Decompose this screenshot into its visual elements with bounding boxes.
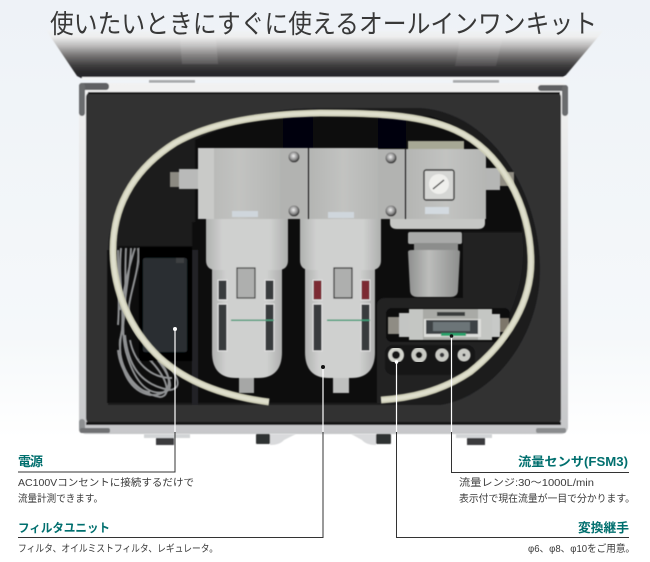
filter heads xyxy=(198,148,378,219)
callout: adapters xyxy=(528,520,635,555)
callout: filter unit: フィルタユニット xyxy=(18,521,110,535)
power unit: cable and adapter xyxy=(118,247,192,397)
leader line: power xyxy=(18,327,177,472)
handle and feet xyxy=(144,434,492,445)
icon: coiled cable xyxy=(118,248,178,397)
callout: flow sensor: 流量レンジ:30〜1000L/min xyxy=(459,477,594,489)
filter bowl 2 xyxy=(300,219,381,393)
callout: adapters: φ6、φ8、φ10をご用意。 xyxy=(528,542,635,555)
left fitting xyxy=(170,169,198,189)
aluminium case xyxy=(79,83,568,434)
icon: pressure gauge xyxy=(424,170,454,200)
black cutouts xyxy=(107,116,522,403)
callout: flow sensor: 流量センサ(FSM3) xyxy=(518,454,628,469)
adapters xyxy=(390,349,468,361)
adapter xyxy=(139,247,192,361)
regulator xyxy=(390,141,486,297)
callout: filter unit: フィルタ、オイルミストフィルタ、レギュレータ。 xyxy=(18,543,218,555)
callout: flow sensor: 表示付で現在流量が一目で分かります。 xyxy=(459,492,635,505)
callout: adapters: 変換継手 xyxy=(578,520,629,535)
flow sensor xyxy=(388,309,509,340)
callout: power xyxy=(18,454,194,505)
callout: power: 流量計測できます。 xyxy=(18,492,103,505)
case frame xyxy=(79,83,568,434)
leader line: flow sensor xyxy=(450,334,629,472)
inner foam panels xyxy=(192,250,198,405)
title: 使いたいときにすぐに使えるオールインワンキット xyxy=(50,9,597,39)
callout: power: 電源 xyxy=(18,454,43,469)
callout: filter unit xyxy=(18,521,218,555)
filter unit xyxy=(170,141,514,393)
air tube xyxy=(113,113,531,402)
callout: flow sensor xyxy=(459,454,635,505)
tube groove xyxy=(108,108,540,405)
leader line: adapters xyxy=(395,360,629,538)
filter bowl 1 xyxy=(206,219,288,393)
case lid xyxy=(46,30,604,83)
callout: power: AC100Vコンセントに接続するだけで xyxy=(18,476,194,489)
connector blocks with screws xyxy=(280,148,405,219)
foam base xyxy=(86,92,561,425)
leader line: filter unit xyxy=(18,365,325,538)
right fitting xyxy=(486,168,514,190)
